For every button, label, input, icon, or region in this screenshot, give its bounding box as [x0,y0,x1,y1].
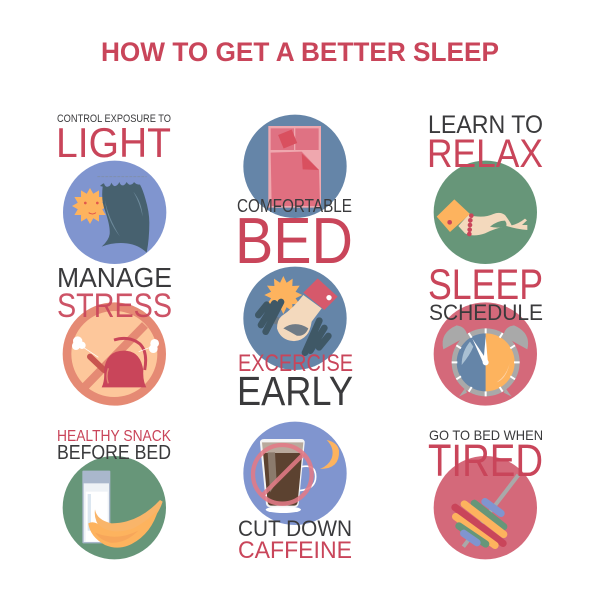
label: sleep: SLEEP [428,261,543,309]
panel: learn to relax [427,111,543,264]
label: bed: BED [235,204,353,277]
label: go to bed when: GO TO BED WHEN [429,427,543,443]
panel: cut down caffeine [238,422,352,564]
panel: sleep schedule [428,261,543,406]
label: manage: MANAGE [57,262,172,293]
label: cut down: CUT DOWN [238,516,352,541]
label: before bed: BEFORE BED [57,442,171,464]
label: caffeine: CAFFEINE [238,537,352,564]
label: relax: RELAX [427,132,543,176]
title: HOW TO GET A BETTER SLEEP [101,37,499,67]
panel: exercise early [237,267,353,414]
panel: go to bed when tired [428,427,543,559]
icon: sun and curtain [63,161,166,264]
label: excercise: EXCERCISE [238,350,353,377]
icon: crossed-out coffee and moon [243,422,347,525]
label: early: EARLY [237,368,353,414]
icon: crossed-out kettle [67,307,162,401]
panel: comfortable bed [235,115,353,277]
icon: alarm clock [434,302,537,406]
icon: milk and bananas [63,456,166,559]
panel: healthy snack before bed [57,428,172,559]
label: tired: TIRED [428,435,543,486]
label: stress: STRESS [57,287,172,325]
icon: spinning top [434,456,537,559]
label: learn to: LEARN TO [428,111,543,139]
panel: control exposure to light [56,113,171,264]
label: schedule: SCHEDULE [429,300,543,325]
panel: manage stress [57,262,172,401]
label: healthy snack: HEALTHY SNACK [57,428,172,445]
label: light: LIGHT [56,119,171,166]
icon: hand with dumbbell [243,267,347,370]
icon: relaxed hand [434,161,537,264]
label: control exposure to: CONTROL EXPOSURE TO [57,113,171,125]
icon: bed [243,115,347,218]
label: comfortable: COMFORTABLE [237,196,352,216]
